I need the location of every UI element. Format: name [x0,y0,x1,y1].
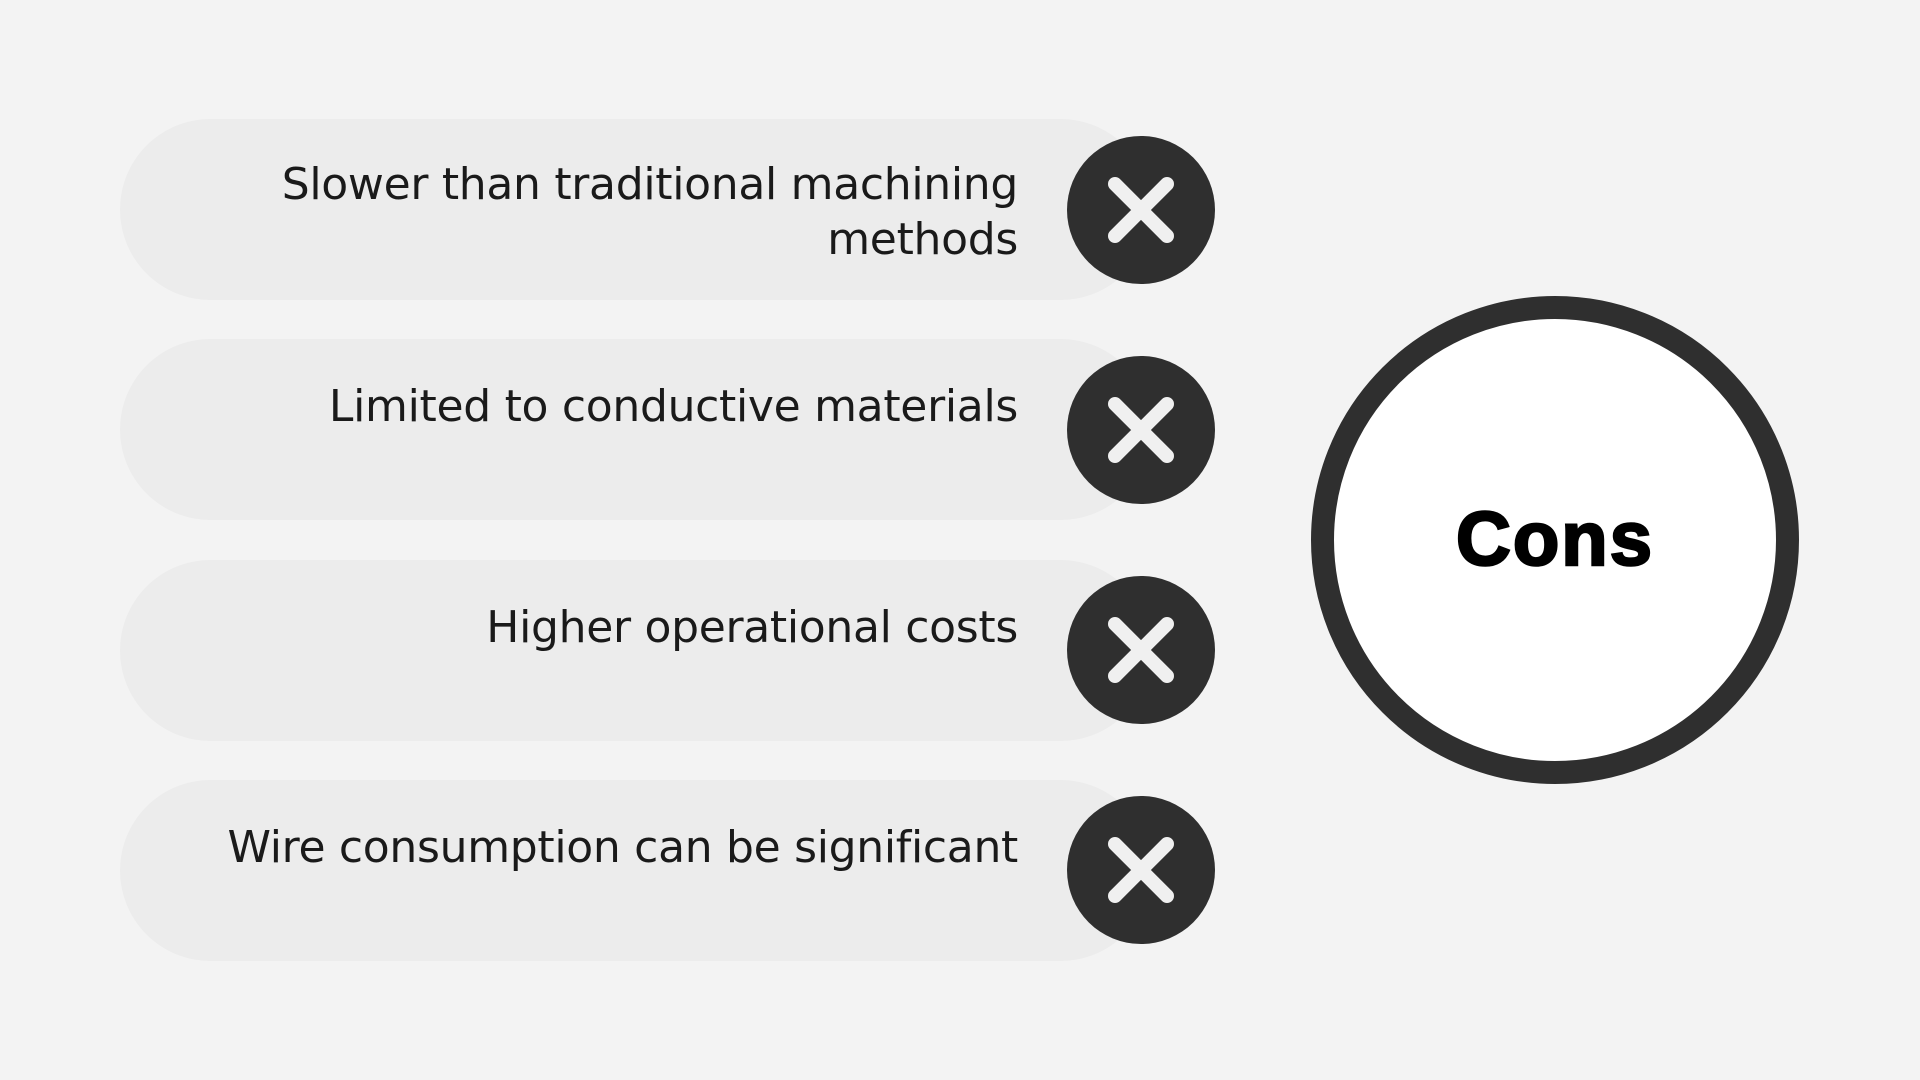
item 2 pill: Limited to conductive materials [329,381,1018,432]
item 2 icon [1067,356,1215,504]
item 2 pill [120,339,1151,520]
item 3 pill: Higher operational costs [486,602,1018,653]
item 4 icon [1067,796,1215,944]
item 3 icon [1067,576,1215,724]
item 1 pill: Slower than traditional machining methods [282,159,1018,265]
item 4 pill [120,780,1151,961]
item 1 pill [120,119,1151,300]
item 4 pill: Wire consumption can be significant [227,822,1018,873]
item 3 pill [120,560,1151,741]
title circle: Cons: Cons [1456,497,1654,582]
title circle: Cons [1311,296,1799,784]
item 1 icon [1067,136,1215,284]
